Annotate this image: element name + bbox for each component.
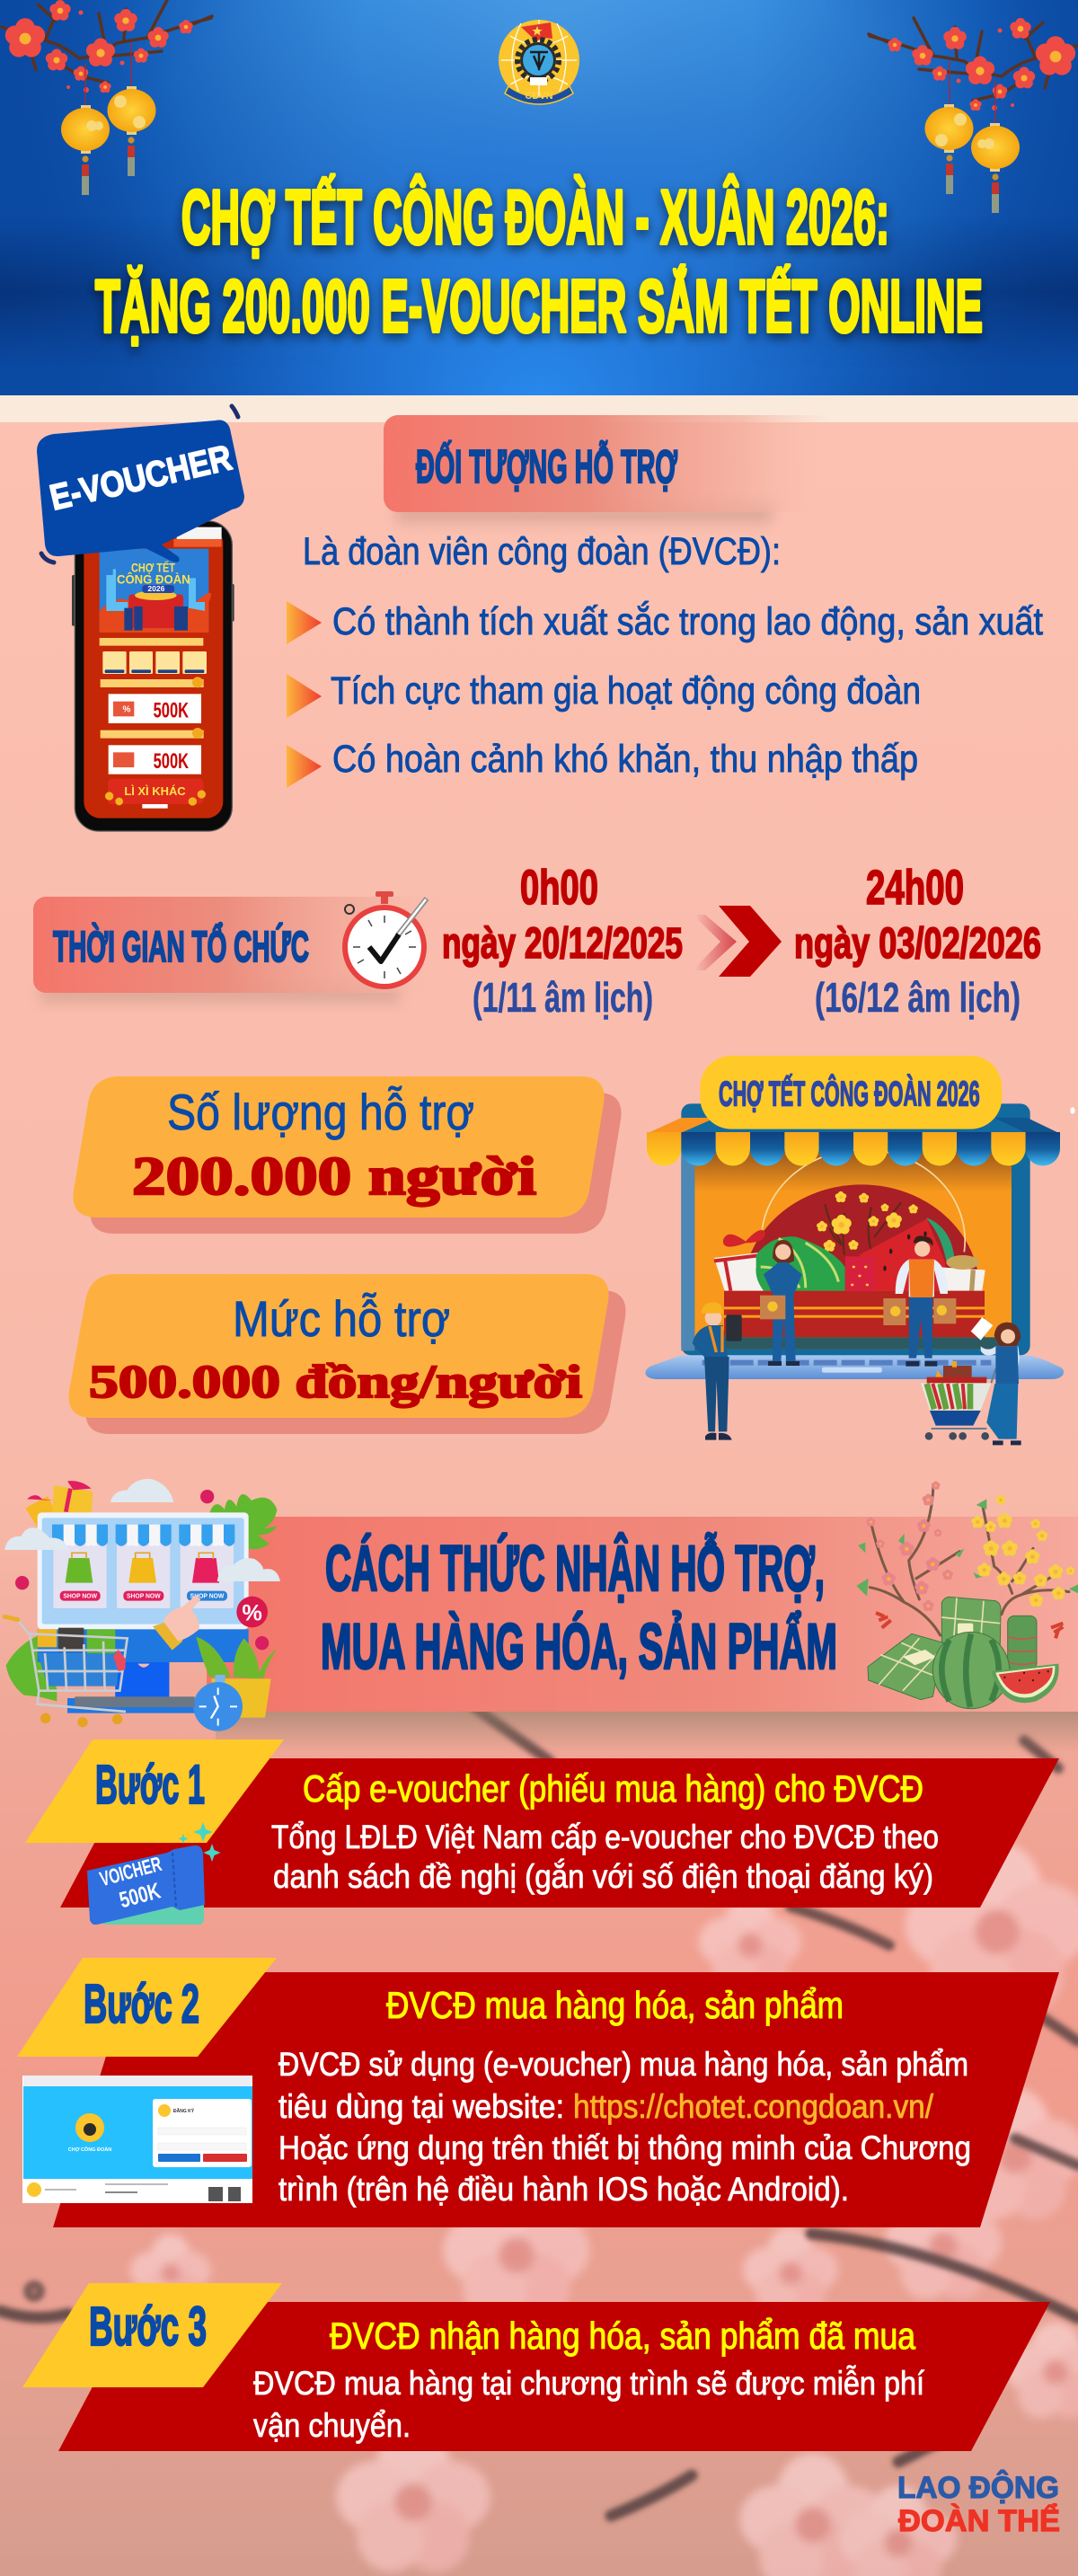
phone mockup: LÌ XÌ KHÁC <box>124 784 186 798</box>
step 2 description: Hoặc ứng dụng trên thiết bị thông minh của Chương <box>278 2129 971 2166</box>
percent badge <box>236 1597 268 1627</box>
shop cards: SHOP NOW <box>190 1593 225 1599</box>
e-voucher speech bubble: E-VOUCHER <box>46 438 235 518</box>
step 2 description <box>278 2046 971 2208</box>
timing heading: THỜI GIAN TỔ CHỨC <box>53 922 309 971</box>
timing banner shadow <box>40 984 400 1002</box>
icon: voucher ticket: 500K <box>117 1878 163 1913</box>
step 3 description: ĐVCĐ mua hàng tại chương trình sẽ được miễn phí <box>253 2365 925 2402</box>
person: man with vest and bags <box>883 1235 956 1367</box>
person: woman with phone <box>971 1317 1021 1445</box>
firecrackers <box>876 1613 1063 1638</box>
step 2 label: Bước 2 <box>84 1973 199 2034</box>
step 1 <box>25 1739 1059 1925</box>
timing banner <box>33 897 455 993</box>
icon: voucher ticket <box>87 1822 221 1925</box>
decoration: left blossoms and lanterns <box>2 0 212 195</box>
pointing hand <box>153 1595 200 1651</box>
publisher logo <box>897 2470 1060 2538</box>
shopping cart <box>4 1616 195 1727</box>
monitor <box>38 1512 249 1629</box>
arrow: start to end <box>693 906 782 977</box>
step 1 description: Tổng LĐLĐ Việt Nam cấp e-voucher cho ĐVCĐ theo <box>271 1819 939 1855</box>
person: woman with bag <box>760 1240 802 1366</box>
e-voucher speech bubble <box>39 406 243 562</box>
website screenshot: ĐĂNG KÝ <box>173 2108 195 2114</box>
leaves <box>856 1499 1078 1597</box>
phone mockup: CHỢ TẾT <box>131 561 175 575</box>
icon: voucher ticket: VOICHER <box>97 1852 164 1890</box>
person: worker with tablet <box>693 1302 742 1440</box>
icon: stopwatch with check <box>342 891 427 989</box>
decoration: right blossoms and lanterns <box>869 18 1078 213</box>
leaves <box>6 1494 277 1701</box>
illustration: Tet branches and food <box>856 1481 1078 1709</box>
bullet: low income: Có hoàn cảnh khó khăn, thu nhập thấp <box>332 738 918 781</box>
panel: number of recipients: 200.000 người <box>132 1146 536 1206</box>
branches <box>870 1485 1069 1635</box>
phone mockup: CÔNG ĐOÀN <box>117 571 190 586</box>
header panel <box>0 0 1078 395</box>
pink orbs <box>15 1490 269 1650</box>
section banner shadow <box>216 1712 1078 1752</box>
icon: trade union emblem: CĐVN <box>525 91 553 102</box>
gifts <box>25 1481 93 1527</box>
panel: how to receive support <box>4 1479 1078 1752</box>
step 3 title: ĐVCĐ nhận hàng hóa, sản phẩm đã mua <box>330 2315 916 2357</box>
step 2 description: trình (trên hệ điều hành IOS hoặc Android). <box>278 2171 849 2208</box>
cylinder banh tet <box>1008 1616 1037 1669</box>
watermelon slice <box>991 1664 1059 1703</box>
step 1 description: danh sách đề nghị (gắn với số điện thoại đăng ký) <box>273 1858 933 1895</box>
section heading <box>321 1533 837 1683</box>
square banh chung <box>868 1597 1001 1700</box>
step 3 ribbon <box>58 2302 1050 2451</box>
panel: support amount: Mức hỗ trợ <box>233 1290 450 1347</box>
step 3 label: Bước 3 <box>89 2296 207 2357</box>
blossom photo background <box>0 1707 1078 2576</box>
laptop screen <box>681 1103 1030 1355</box>
clouds <box>4 1479 280 1581</box>
heading banner shadow <box>395 503 773 523</box>
section banner <box>207 1517 1078 1712</box>
step 2 <box>17 1958 1059 2227</box>
small decorative speck <box>1070 1107 1075 1114</box>
end time <box>794 861 1041 1021</box>
illustration: Tet market laptop storefront <box>645 1056 1075 1445</box>
step 3 description <box>253 2365 925 2444</box>
shop cards: SHOP NOW <box>127 1593 161 1599</box>
start time: (1/11 âm lịch) <box>473 974 653 1021</box>
panel: target beneficiaries <box>39 406 1043 831</box>
bullet: active participation: Tích cực tham gia hoạt động công đoàn <box>331 669 921 713</box>
shop cards <box>52 1525 234 1608</box>
step 1 description <box>271 1819 939 1895</box>
watermelon <box>932 1632 1010 1709</box>
step 1 ribbon <box>60 1758 1059 1908</box>
keyboard base <box>645 1355 1064 1379</box>
panel: support amount: 500.000 đồng/người <box>89 1357 582 1408</box>
step 2 description: ĐVCĐ sử dụng (e-voucher) mua hàng hóa, sản phẩm <box>278 2046 968 2083</box>
start time <box>442 861 683 1021</box>
step 3 tag <box>22 2283 282 2387</box>
phone mockup: 2026 <box>147 584 165 593</box>
heading banner <box>384 415 833 512</box>
potted plant <box>196 1637 277 1718</box>
cream band <box>0 395 1078 422</box>
illustration: online shop monitor <box>4 1479 280 1731</box>
website screenshot <box>22 2076 252 2203</box>
phone mockup: % <box>123 705 131 715</box>
peach flowers <box>866 1481 953 1611</box>
publisher logo: LAO ĐỘNG <box>897 2470 1059 2505</box>
step 2 description: tiêu dùng tại website: <box>278 2088 564 2125</box>
phone mockup: 500K <box>154 749 189 774</box>
shop cards: SHOP NOW <box>63 1593 97 1599</box>
panel: number of recipients <box>74 1076 621 1234</box>
icon: trade union emblem <box>499 20 579 104</box>
panel: number of recipients: Số lượng hỗ trợ <box>167 1084 474 1140</box>
phone mockup: 500K <box>154 698 189 722</box>
title <box>95 174 983 348</box>
clock <box>193 1675 243 1731</box>
step 1 tag <box>25 1739 284 1843</box>
awning <box>647 1118 1060 1165</box>
start time: ngày 20/12/2025 <box>442 920 683 968</box>
apricot flowers <box>971 1495 1074 1607</box>
festive arch display <box>714 1149 985 1291</box>
panel: support amount <box>69 1274 625 1434</box>
panel: event timing <box>33 861 1041 1021</box>
website address: https://chotet.congdoan.vn/ <box>573 2088 934 2125</box>
market stall counter <box>694 1291 1012 1350</box>
step 3 <box>22 2283 1050 2451</box>
intro line: Là đoàn viên công đoàn (ĐVCĐ): <box>303 530 781 573</box>
start time: 0h00 <box>520 861 598 915</box>
step 2 title: ĐVCĐ mua hàng hóa, sản phẩm <box>386 1984 844 2026</box>
step 2 ribbon <box>53 1972 1059 2227</box>
market name pill <box>700 1056 1002 1129</box>
shopping cart <box>921 1361 995 1440</box>
percent badge: % <box>242 1600 262 1625</box>
publisher logo: ĐOÀN THỂ <box>898 2504 1060 2538</box>
website screenshot: CHỢ CÔNG ĐOÀN <box>68 2146 111 2153</box>
step 3 description: vận chuyển. <box>253 2407 411 2444</box>
phone mockup <box>72 521 234 831</box>
heading: ĐỐI TƯỢNG HỖ TRỢ <box>416 440 677 493</box>
step 1 label: Bước 1 <box>95 1754 205 1815</box>
end time: 24h00 <box>866 861 964 915</box>
step 2 tag <box>17 1958 277 2057</box>
step 1 title: Cấp e-voucher (phiếu mua hàng) cho ĐVCĐ <box>303 1767 923 1810</box>
